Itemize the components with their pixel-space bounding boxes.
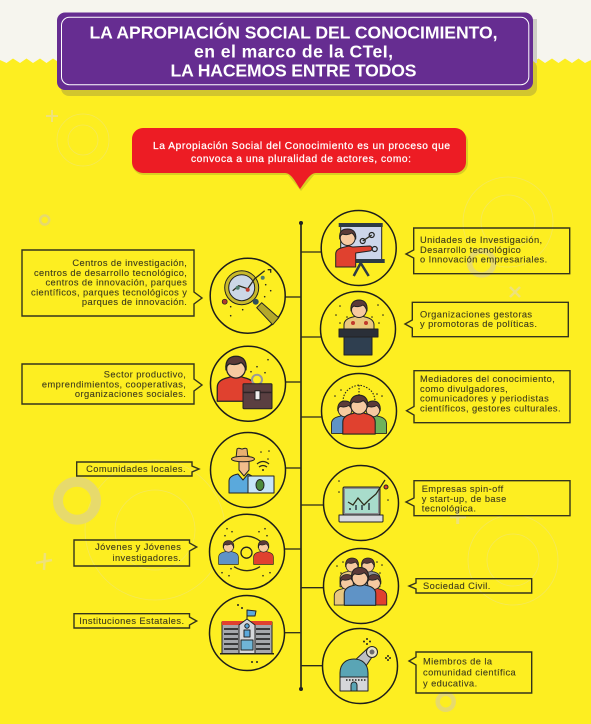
icon: group of three mediators (322, 374, 396, 448)
actor: empresas spin-off (301, 466, 570, 540)
callout (406, 228, 570, 274)
callout: comunidad científica (423, 668, 517, 678)
icon: magnifying glass (210, 258, 285, 333)
callout: centros de innovación, parques (45, 278, 187, 288)
actor: jóvenes investigadores (74, 514, 301, 589)
callout: organizaciones sociales. (75, 389, 186, 399)
callout (22, 250, 202, 316)
actor: comunidades locales (77, 432, 301, 508)
callout: como divulgadores, (420, 384, 508, 394)
icon: laptop with chart (324, 466, 398, 540)
connector (285, 381, 301, 383)
actor: organizaciones gestoras (301, 292, 568, 366)
actor: centros de investigación (22, 250, 301, 333)
callout: centros de desarrollo tecnológico, (34, 268, 187, 278)
callout (407, 371, 570, 423)
title text: LA HACEMOS ENTRE TODOS (170, 60, 417, 80)
title text: LA APROPIACIÓN SOCIAL DEL CONOCIMIENTO, (90, 22, 498, 42)
red speech bubble intro (132, 128, 468, 191)
connector (301, 336, 321, 338)
connector (285, 296, 301, 298)
title banner (57, 12, 537, 96)
actor: sociedad civil (301, 548, 532, 624)
callout: Sector productivo, (104, 370, 186, 380)
callout: Centros de investigación, (72, 258, 187, 268)
callout: Miembros de la (423, 657, 493, 667)
bubble text: convoca a una pluralidad de actores, como: (191, 154, 411, 165)
callout (409, 579, 532, 593)
callout: y promotoras de políticas. (420, 319, 537, 329)
icon: speaker at podium (320, 292, 396, 366)
callout: Empresas spin-off (422, 484, 504, 494)
background decoration: rings and crosses (36, 110, 558, 710)
callout: Desarrollo tecnológico (420, 245, 521, 255)
actor: mediadores del conocimiento (301, 371, 570, 448)
callout: emprendimientos, cooperativas, (42, 379, 186, 389)
actor: instituciones estatales (74, 596, 301, 670)
callout: Instituciones Estatales. (79, 616, 184, 626)
callout (77, 462, 199, 476)
central timeline spine (299, 221, 303, 691)
callout: investigadores. (112, 553, 181, 563)
background: zigzag off-white top band (0, 0, 591, 63)
callout (22, 364, 202, 404)
callout: Jóvenes y Jóvenes (95, 542, 181, 552)
callout: Comunidades locales. (86, 464, 186, 474)
bubble text: La Apropiación Social del Conocimiento es un proceso que (153, 141, 450, 152)
icon: observatory (322, 628, 398, 704)
callout: científicos, gestores culturales. (420, 404, 561, 414)
icon: presenter at board (321, 210, 396, 286)
callout: Sociedad Civil. (423, 581, 491, 591)
icon: crowd of people (324, 548, 398, 624)
callout: o Innovación empresariales. (420, 254, 548, 264)
callout: científicos, parques tecnológicos y (31, 287, 187, 297)
callout: Unidades de Investigación, (420, 235, 543, 245)
callout (74, 614, 197, 628)
connector (285, 632, 301, 634)
actor: sector productivo (22, 346, 301, 421)
connector (301, 416, 322, 418)
callout (409, 652, 532, 693)
icon: farmer with laptop (210, 432, 286, 508)
callout (405, 302, 568, 337)
actor: unidades de investigación (301, 210, 570, 286)
callout: Mediadores del conocimiento, (420, 374, 555, 384)
title text: en el marco de la CTeI, (194, 42, 393, 62)
connector (285, 467, 301, 469)
connector (301, 504, 324, 506)
callout: Organizaciones gestoras (420, 310, 532, 320)
callout: y educativa. (423, 679, 478, 689)
connector (301, 587, 324, 589)
connector (301, 665, 323, 667)
actor: comunidad científica (301, 628, 532, 704)
callout (406, 481, 570, 516)
callout: comunicadores y periodistas (420, 394, 549, 404)
connector (301, 251, 322, 253)
icon: two young people (210, 514, 284, 589)
callout: y start-up, de base (422, 494, 507, 504)
callout: parques de innovación. (82, 297, 187, 307)
callout: tecnológica. (422, 504, 476, 514)
callout (74, 540, 197, 566)
connector (285, 548, 301, 550)
icon: government building (210, 596, 284, 670)
icon: person with briefcase (210, 346, 286, 421)
